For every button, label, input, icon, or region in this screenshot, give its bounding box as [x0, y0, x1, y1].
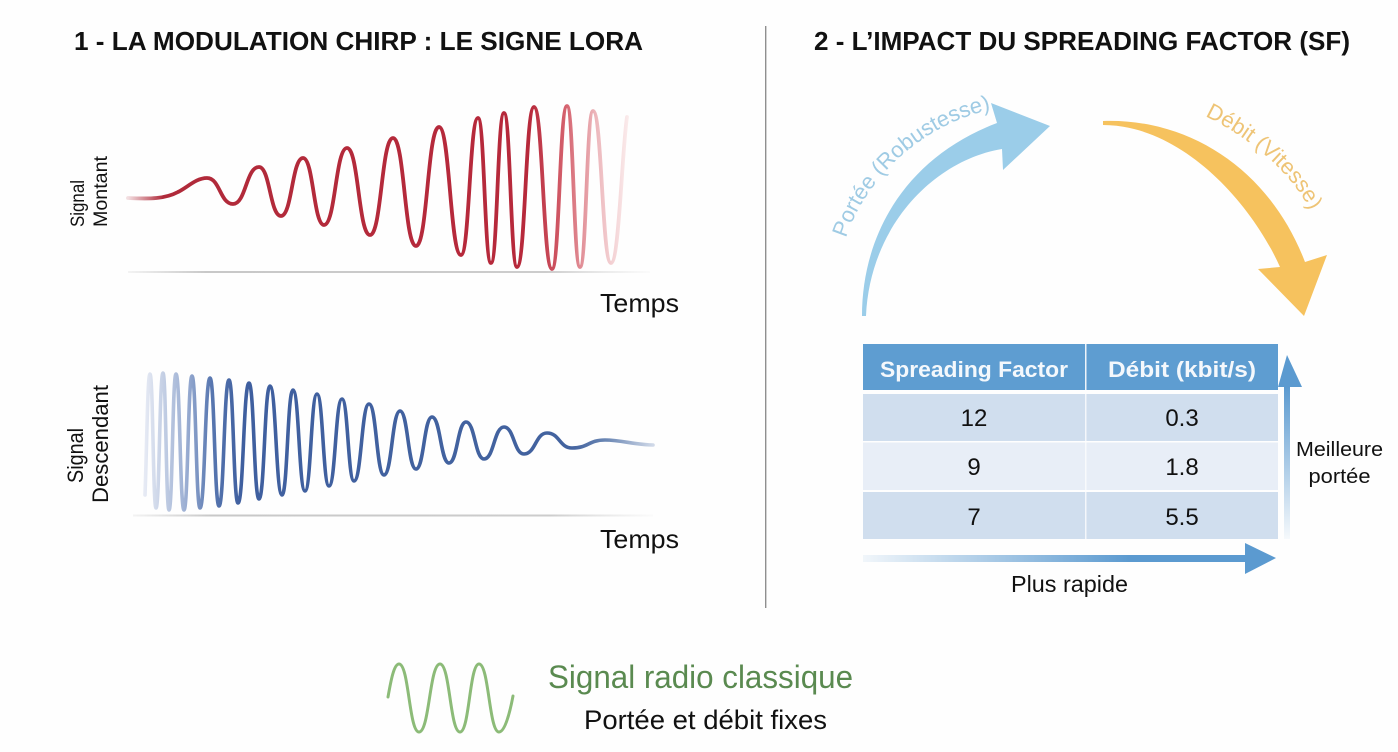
table: spreading factor vs debit [863, 344, 1278, 539]
label: signal descendant: Descendant [88, 385, 113, 503]
label: plus rapide: Plus rapide [1011, 571, 1128, 597]
arrow: debit, falling orange arc [1103, 121, 1327, 316]
heading: section 1: 1 - LA MODULATION CHIRP : LE SIGNE LORA [74, 26, 643, 56]
label: signal montant: Montant [91, 155, 112, 227]
label: signal montant [68, 155, 112, 227]
time axis [128, 271, 650, 273]
row: SF 12: 0.3 [1165, 405, 1199, 432]
icon: green sine wave [388, 664, 513, 732]
label: debit vitesse: Débit (Vitesse) [1206, 103, 1322, 209]
row: SF 7 [863, 492, 1278, 539]
table header: Débit (kbit/s) [1108, 357, 1256, 382]
row: SF 9: 9 [967, 454, 981, 481]
label: meilleure portee: portée [1308, 465, 1370, 488]
row: SF 7: 7 [967, 504, 981, 531]
row: SF 12 [863, 394, 1278, 441]
table header [863, 344, 1278, 390]
axis label: temps: Temps [600, 288, 679, 318]
label: signal descendant [63, 385, 113, 503]
label: signal montant: Signal [68, 180, 89, 227]
heading: section 2: 2 - L’IMPACT DU SPREADING FACTOR (SF) [814, 26, 1350, 56]
label: meilleure portee: Meilleure [1296, 438, 1383, 461]
legend: classic radio signal [388, 659, 853, 735]
panel: falling chirp [63, 373, 679, 554]
legend title: Signal radio classique [548, 659, 853, 695]
chart: rising chirp waveform [128, 106, 627, 269]
label: portee robustesse: Portée (Robustesse) [832, 95, 989, 236]
axis label: temps: Temps [600, 524, 679, 554]
arrow: meilleure portee, vertical [1278, 355, 1302, 539]
panel: rising chirp [68, 106, 679, 318]
chart: falling chirp waveform [145, 373, 653, 510]
legend subtitle: Portée et débit fixes [584, 705, 827, 735]
row: SF 12: 12 [961, 405, 987, 432]
row: SF 7: 5.5 [1165, 504, 1199, 531]
arrow: plus rapide, horizontal [863, 543, 1276, 574]
label: meilleure portee [1296, 438, 1383, 488]
row: SF 9: 1.8 [1165, 454, 1199, 481]
label: signal descendant: Signal [63, 428, 88, 483]
row: SF 9 [863, 442, 1278, 490]
time axis [133, 514, 653, 516]
table header: Spreading Factor [880, 357, 1068, 382]
central divider [765, 26, 766, 608]
arrow: portee, rising blue arc [862, 103, 1050, 316]
